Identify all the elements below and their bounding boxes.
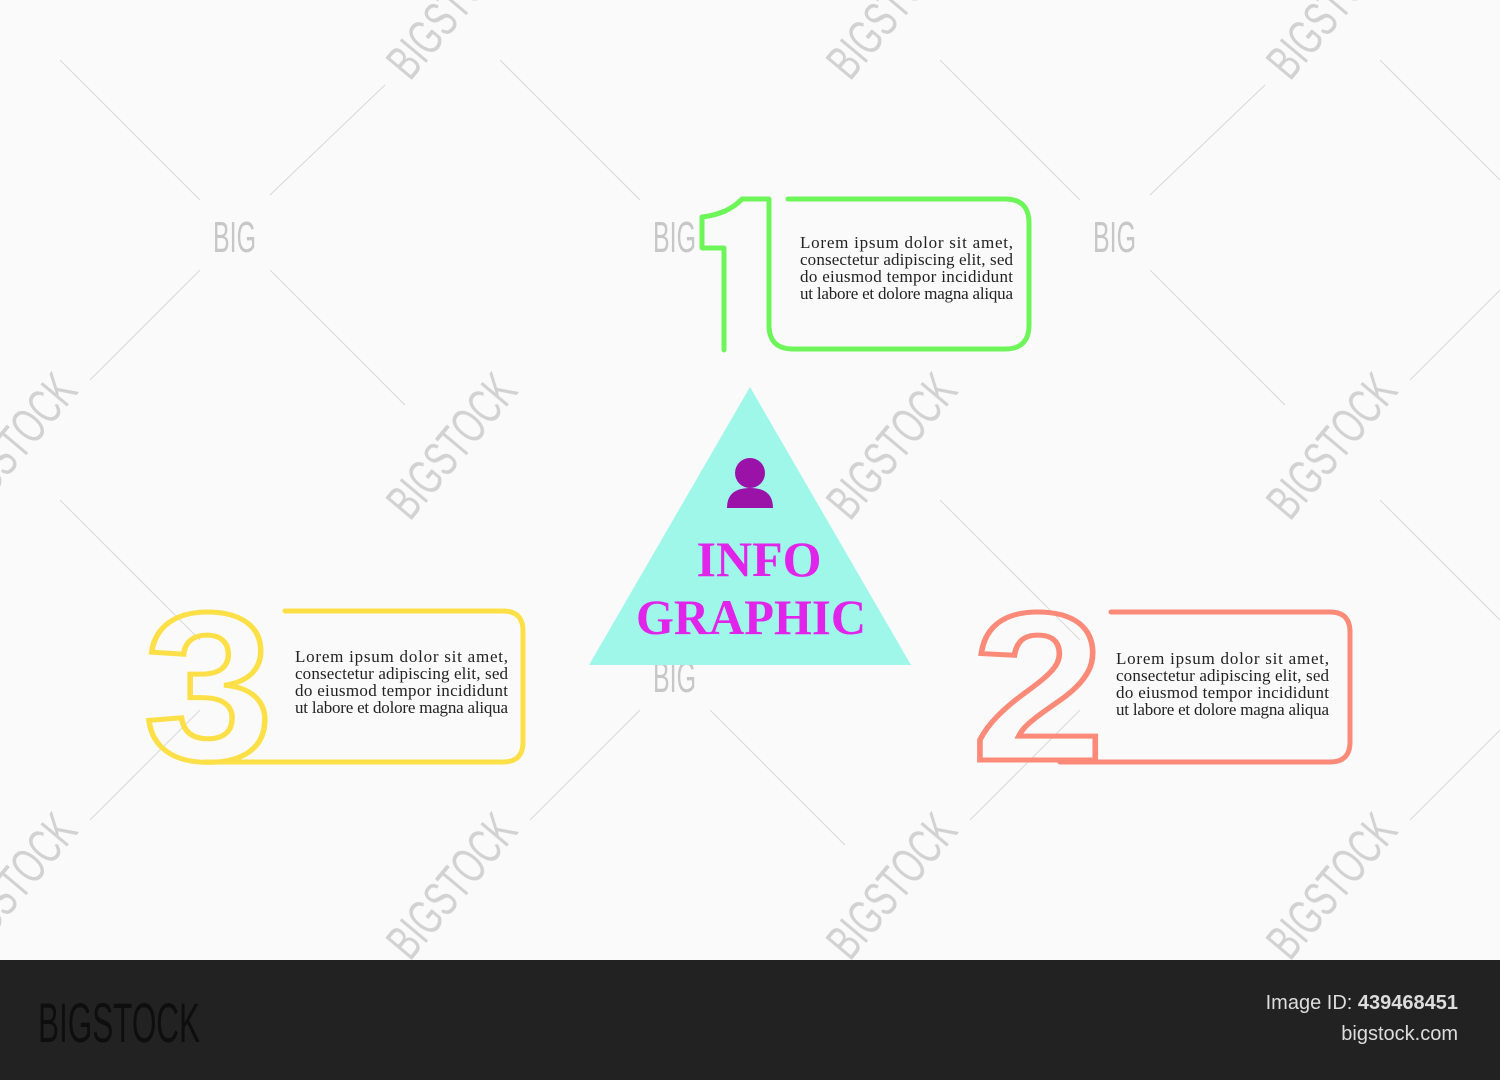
box 3: yellow: 3	[144, 569, 273, 806]
image id: bigstock.com	[1341, 1023, 1458, 1045]
image id: Image ID: 439468451	[1266, 992, 1458, 1014]
text: BIG	[213, 213, 256, 262]
image id	[1266, 992, 1458, 1045]
box 3: yellow	[144, 569, 523, 806]
text 1: ut labore et dolore magna aliqua	[800, 284, 1013, 303]
text: BIG	[653, 213, 696, 262]
text: BIG	[653, 653, 696, 702]
title	[636, 531, 866, 645]
text 3	[295, 647, 508, 717]
text 1	[800, 233, 1014, 303]
logo: BIGSTOCK	[38, 991, 200, 1054]
text: BIGSTOCK	[376, 803, 528, 969]
text: BIGSTOCK	[816, 803, 968, 969]
text: BIGSTOCK	[1256, 803, 1408, 969]
footer	[0, 960, 1500, 1080]
box 2: salmon: 2	[972, 568, 1105, 805]
text 3: Lorem ipsum dolor sit amet,	[295, 647, 508, 666]
box 1: green	[702, 199, 1029, 350]
text 2: consectetur adipiscing elit, sed	[1116, 666, 1330, 685]
center triangle	[589, 387, 911, 665]
text 1: Lorem ipsum dolor sit amet,	[800, 233, 1013, 252]
text 2: Lorem ipsum dolor sit amet,	[1116, 649, 1329, 668]
text 2	[1116, 649, 1330, 719]
text: BIG	[1093, 213, 1136, 262]
text 1: do eiusmod tempor incididunt	[800, 267, 1013, 286]
text: BIGSTOCK	[816, 363, 968, 529]
text 2: do eiusmod tempor incididunt	[1116, 683, 1329, 702]
icon: person	[727, 458, 773, 508]
text 3: do eiusmod tempor incididunt	[295, 681, 508, 700]
title: INFO	[696, 531, 822, 587]
text: BIGSTOCK	[376, 363, 528, 529]
text 3: consectetur adipiscing elit, sed	[295, 664, 508, 683]
text: BIGSTOCK	[1256, 363, 1408, 529]
box 2: salmon	[972, 568, 1350, 805]
text 1: consectetur adipiscing elit, sed	[800, 250, 1014, 269]
text 3: ut labore et dolore magna aliqua	[295, 698, 508, 717]
text 2: ut labore et dolore magna aliqua	[1116, 700, 1329, 719]
title: GRAPHIC	[636, 589, 866, 645]
